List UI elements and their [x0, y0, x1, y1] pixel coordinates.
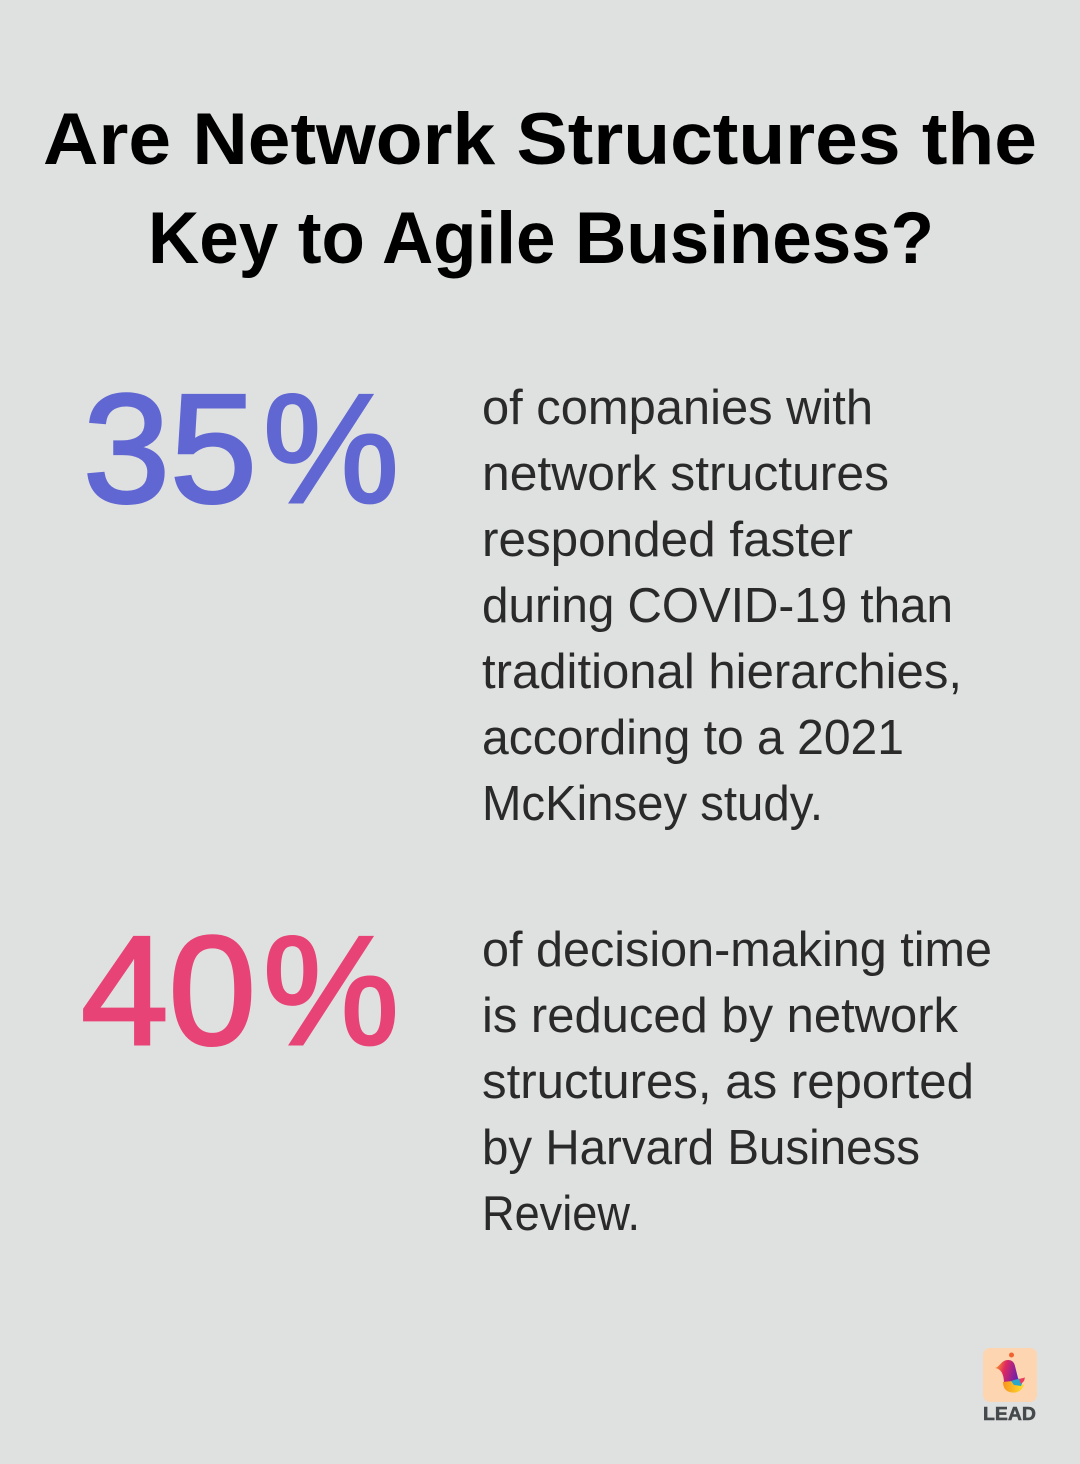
logo wordmark: LEAD	[983, 1403, 1036, 1424]
stat: 40%: %	[263, 904, 399, 1077]
title	[43, 99, 1037, 279]
text block: 35% description	[482, 381, 962, 831]
text block: 40% description	[482, 923, 992, 1241]
stat: 35%: 35	[83, 362, 257, 535]
stat: 40%	[81, 904, 399, 1077]
icon: logo bird	[995, 1360, 1025, 1393]
title: Are Network Structures the	[43, 99, 1037, 180]
text block: 35% description: traditional hierarchies,	[482, 645, 962, 699]
text block: 40% description: is reduced by network	[482, 989, 958, 1043]
text block: 35% description: of companies with	[482, 381, 873, 435]
text block: 35% description: responded faster	[482, 513, 853, 567]
text block: 40% description: structures, as reported	[482, 1055, 974, 1109]
text block: 40% description: of decision-making time	[482, 923, 992, 977]
logo: LEAD	[983, 1348, 1037, 1424]
icon: logo dot	[1009, 1352, 1014, 1358]
stat: 35%	[83, 362, 399, 535]
text block: 35% description: McKinsey study.	[482, 777, 823, 831]
icon: logo tile	[983, 1348, 1037, 1402]
stat: 35%: %	[263, 362, 399, 535]
text block: 35% description: network structures	[482, 447, 889, 501]
text block: 35% description: according to a 2021	[482, 711, 904, 765]
text block: 35% description: during COVID-19 than	[482, 579, 953, 633]
text block: 40% description: Review.	[482, 1187, 640, 1241]
stat: 40%: 40	[81, 904, 256, 1077]
text block: 40% description: by Harvard Business	[482, 1121, 920, 1175]
title: Key to Agile Business?	[148, 198, 934, 279]
